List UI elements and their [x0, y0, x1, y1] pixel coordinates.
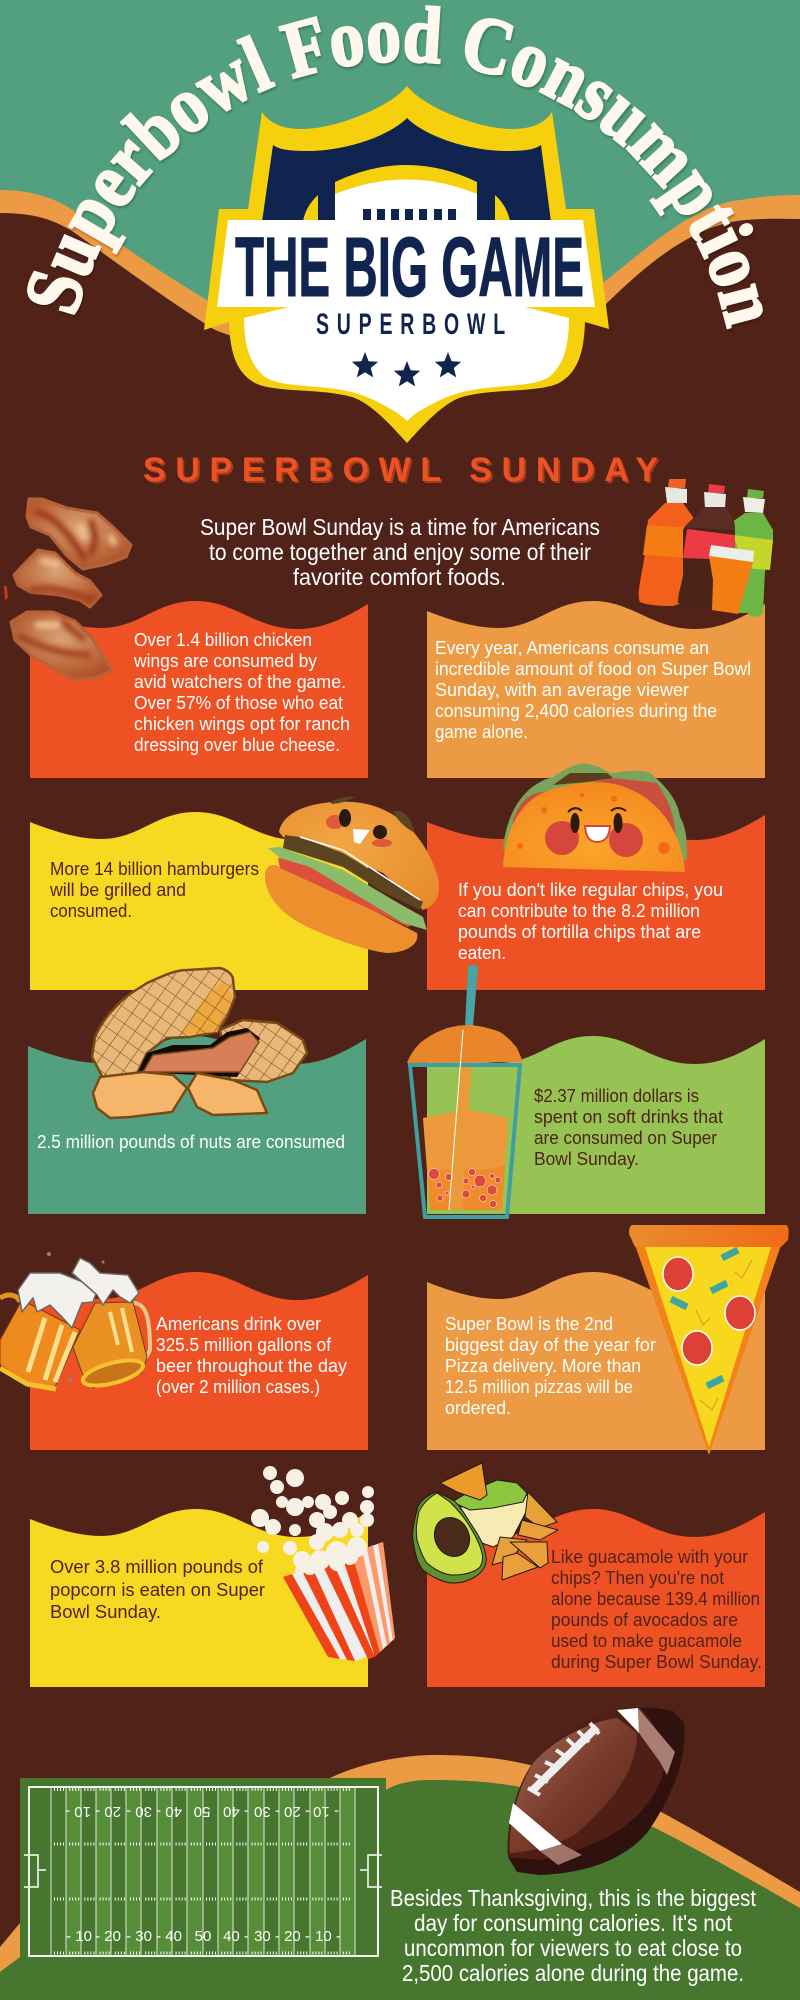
yard numbers bottom: 40 - [223, 1928, 249, 1945]
panel: soft drinks [427, 1036, 765, 1214]
panel: hamburgers [30, 812, 368, 990]
background: teal sky [0, 0, 800, 420]
yard numbers top [65, 1803, 339, 1820]
panel: guacamole: used to make guacamole [551, 1630, 742, 1651]
yard numbers top: - 30 [254, 1803, 280, 1820]
panel: popcorn: popcorn is eaten on Super [50, 1579, 265, 1600]
panel: beer: Americans drink over [156, 1313, 321, 1334]
yard numbers top: 10 - [65, 1803, 91, 1820]
panel: popcorn: Bowl Sunday. [50, 1601, 161, 1622]
yard numbers bottom: 30 - [254, 1928, 280, 1945]
panel: pizza: 12.5 million pizzas will be [445, 1376, 633, 1397]
icon: taco [503, 764, 687, 872]
yard numbers bottom: 10 - [315, 1928, 341, 1945]
logo subtitle: SUPERBOWL [316, 308, 505, 341]
icon: peanuts [92, 968, 307, 1118]
panel: tortilla chips: eaten. [458, 942, 506, 963]
heading: Superbowl Sunday: SUPERBOWL SUNDAY [143, 451, 658, 489]
yard numbers bottom: - 20 [95, 1928, 121, 1945]
panel: pizza: biggest day of the year for [445, 1334, 656, 1355]
panel: chicken wings: avid watchers of the game. [134, 671, 346, 692]
yard numbers bottom: 50 [195, 1928, 211, 1945]
yard numbers bottom [66, 1928, 341, 1945]
intro text: favorite comfort foods. [293, 564, 506, 590]
yard numbers bottom: - 40 [156, 1928, 182, 1945]
panel: guacamole: alone because 139.4 million [551, 1588, 760, 1609]
closing text: day for consuming calories. It's not [414, 1910, 733, 1936]
intro text [200, 514, 600, 590]
yard numbers top: - 10 [313, 1803, 339, 1820]
panel: guacamole: during Super Bowl Sunday. [551, 1651, 762, 1672]
panel: tortilla chips: can contribute to the 8.2 million [458, 900, 700, 921]
panel: chicken wings [30, 601, 368, 778]
panel: beer: (over 2 million cases.) [156, 1376, 320, 1397]
panel: soft drinks: are consumed on Super [534, 1127, 717, 1148]
panel: hamburgers: More 14 billion hamburgers [50, 858, 259, 879]
closing text: uncommon for viewers to eat close to [404, 1935, 742, 1961]
panel: beer: beer throughout the day [156, 1355, 348, 1376]
panel: nuts: 2.5 million pounds of nuts are consumed [37, 1131, 345, 1152]
background: lower green hill [0, 1780, 800, 2000]
icon: beer mugs [0, 1252, 150, 1391]
yard numbers bottom: - 30 [126, 1928, 152, 1945]
intro text: Super Bowl Sunday is a time for Americans [200, 514, 600, 540]
panel: pizza [427, 1272, 765, 1450]
panel: chicken wings: dressing over blue cheese. [134, 734, 340, 755]
panel: nuts [28, 1036, 366, 1214]
closing text: Besides Thanksgiving, this is the biggest [390, 1885, 757, 1911]
yard numbers bottom: 20 - [284, 1928, 310, 1945]
panel: calories: Every year, Americans consume an [435, 637, 709, 658]
panel: pizza: Pizza delivery. More than [445, 1355, 641, 1376]
goal posts [24, 1855, 382, 1887]
background: lower orange wave [0, 1755, 800, 2000]
panel: soft drinks: Bowl Sunday. [534, 1148, 639, 1169]
logo stars [352, 352, 461, 386]
panel: chicken wings: wings are consumed by [133, 650, 318, 671]
panel: chicken wings: Over 57% of those who eat [134, 692, 343, 713]
panel: soft drinks: $2.37 million dollars is [534, 1085, 699, 1106]
panel: calories [427, 601, 765, 778]
yard numbers top: 40 - [156, 1803, 182, 1820]
panel: tortilla chips [427, 812, 765, 990]
icon: soda bottles [639, 479, 773, 617]
icon: bubble tea cup [407, 965, 523, 1217]
icon: popcorn [251, 1466, 395, 1661]
panel: pizza: Super Bowl is the 2nd [445, 1313, 613, 1334]
panel: guacamole: chips? Then you're not [551, 1567, 724, 1588]
panel: calories: Sunday, with an average viewer [435, 679, 689, 700]
icon: chicken wings [4, 499, 131, 679]
logo: The Big Game shield [204, 86, 609, 443]
yard numbers top: - 20 [284, 1803, 310, 1820]
title: Superbowl Food Consumption [27, 5, 764, 331]
panel: tortilla chips: pounds of tortilla chips that are [458, 921, 701, 942]
heading: Superbowl Sunday: SUPERBOWL SUNDAY [145, 453, 660, 491]
panel: pizza: ordered. [445, 1397, 511, 1418]
panel: tortilla chips: If you don't like regular chips, you [458, 879, 723, 900]
panel: calories: incredible amount of food on Super Bowl [435, 658, 751, 679]
panel: beer [30, 1272, 368, 1450]
football field [20, 1778, 386, 1968]
panel: guacamole [427, 1509, 765, 1687]
icon: pizza slice [629, 1225, 789, 1455]
intro text: to come together and enjoy some of their [209, 539, 591, 565]
yard numbers top: 20 - [95, 1803, 121, 1820]
closing text [390, 1885, 757, 1986]
icon: avocado and guacamole [413, 1463, 558, 1583]
closing text: 2,500 calories alone during the game. [402, 1960, 744, 1986]
panel: chicken wings: chicken wings opt for ranch [134, 713, 350, 734]
panel: calories: consuming 2,400 calories during the [435, 700, 717, 721]
panel: beer: 325.5 million gallons of [156, 1334, 332, 1355]
panel: calories: game alone. [435, 721, 528, 742]
yard numbers top: 50 [194, 1803, 210, 1820]
icon: football [508, 1707, 685, 1875]
panel: hamburgers: will be grilled and [49, 879, 186, 900]
panel: chicken wings: Over 1.4 billion chicken [134, 629, 312, 650]
panel: popcorn [30, 1509, 368, 1687]
panel: popcorn: Over 3.8 million pounds of [50, 1556, 264, 1577]
panel: guacamole: Like guacamole with your [551, 1546, 748, 1567]
panel: guacamole: pounds of avocados are [551, 1609, 738, 1630]
yard numbers top: - 40 [223, 1803, 249, 1820]
icon: hamburger [265, 797, 439, 953]
yard numbers bottom: - 10 [66, 1928, 92, 1945]
panel: hamburgers: consumed. [50, 900, 132, 921]
yard numbers top: 30 - [126, 1803, 152, 1820]
panel: soft drinks: spent on soft drinks that [534, 1106, 723, 1127]
